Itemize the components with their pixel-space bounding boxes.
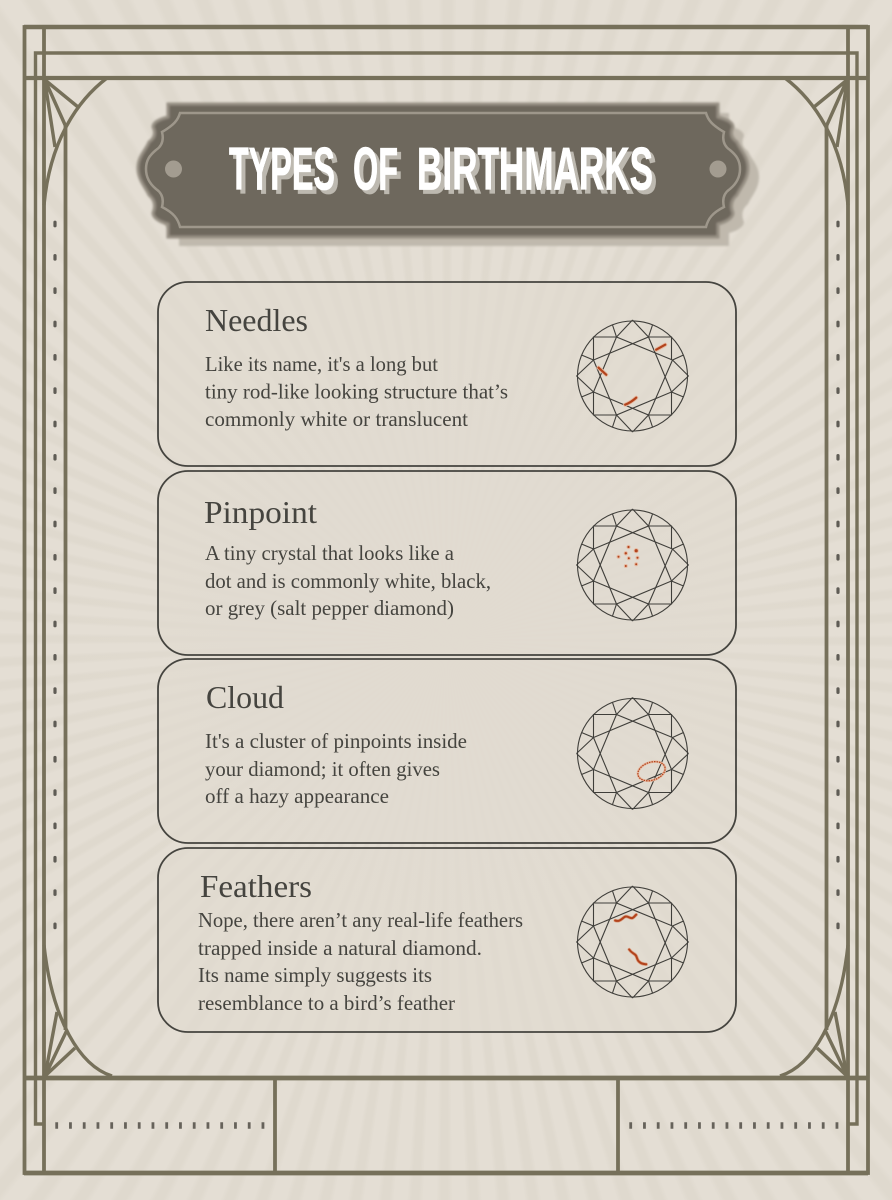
panel: pinpoint (158, 471, 736, 655)
right footer dotted row (629, 1122, 839, 1129)
panel: feathers (158, 848, 736, 1032)
description: feathers: resemblance to a bird’s feather (198, 991, 455, 1015)
description: needles: tiny rod-like looking structure that’s (205, 380, 508, 404)
right dotted column (836, 222, 840, 936)
description: needles: Like its name, it's a long but (205, 352, 438, 376)
icon: diamond with cloud (576, 698, 688, 810)
right corner ornaments (780, 78, 848, 1076)
heading: pinpoint: Pinpoint (204, 494, 317, 530)
footer base rule (24, 1171, 868, 1175)
title: BIRTHMARKS (417, 136, 653, 202)
left inner rule (64, 125, 67, 1030)
footer divider left (273, 1078, 277, 1173)
description: needles: commonly white or translucent (205, 407, 468, 431)
title shadow: BIRTHMARKS (421, 140, 657, 206)
banner inner outline (146, 113, 740, 227)
left footer dotted row (55, 1122, 265, 1129)
title banner (138, 104, 759, 246)
description: needles (205, 352, 508, 431)
header rule (24, 76, 868, 80)
banner shadow (149, 113, 759, 246)
heading: needles: Needles (205, 302, 308, 338)
top rule thickening (24, 25, 868, 29)
title shadow: TYPES (233, 140, 339, 206)
icon: diamond with feathers (576, 886, 688, 998)
description: feathers: trapped inside a natural diamond. (198, 936, 482, 960)
card outline (158, 848, 736, 1032)
left dotted column (53, 222, 57, 936)
description: feathers (198, 908, 523, 1015)
card outline (158, 659, 736, 843)
left corner ornaments (44, 78, 112, 1076)
banner left rivet (165, 160, 182, 178)
card outline (158, 471, 736, 655)
panel: needles (158, 282, 736, 466)
banner plate (138, 104, 748, 237)
panel: cloud (158, 659, 736, 843)
banner right rivet (710, 160, 726, 178)
heading: cloud: Cloud (206, 679, 284, 715)
description: cloud: off a hazy appearance (205, 784, 389, 808)
title: OF (353, 136, 398, 202)
right vertical rule (846, 27, 850, 1173)
heading: feathers: Feathers (200, 868, 312, 904)
title (229, 136, 653, 202)
description: cloud: your diamond; it often gives (205, 757, 440, 781)
right inner rule (825, 125, 828, 1030)
title shadow: OF (357, 140, 402, 206)
title shadow (233, 140, 657, 206)
description: cloud: It's a cluster of pinpoints inside (205, 729, 467, 753)
description: pinpoint: A tiny crystal that looks like a (205, 541, 455, 565)
description: feathers: Nope, there aren’t any real-life feathers (198, 908, 523, 932)
description: pinpoint (205, 541, 491, 620)
title: TYPES (229, 136, 335, 202)
icon: diamond with needles (576, 320, 688, 432)
description: pinpoint: or grey (salt pepper diamond) (205, 596, 454, 620)
description: pinpoint: dot and is commonly white, black, (205, 569, 491, 593)
footer rule (24, 1076, 868, 1080)
description: feathers: Its name simply suggests its (198, 963, 432, 987)
icon: diamond with pinpoints (576, 509, 688, 621)
footer divider right (616, 1078, 620, 1173)
card outline (158, 282, 736, 466)
description: cloud (205, 729, 467, 808)
left vertical rule (42, 27, 46, 1173)
